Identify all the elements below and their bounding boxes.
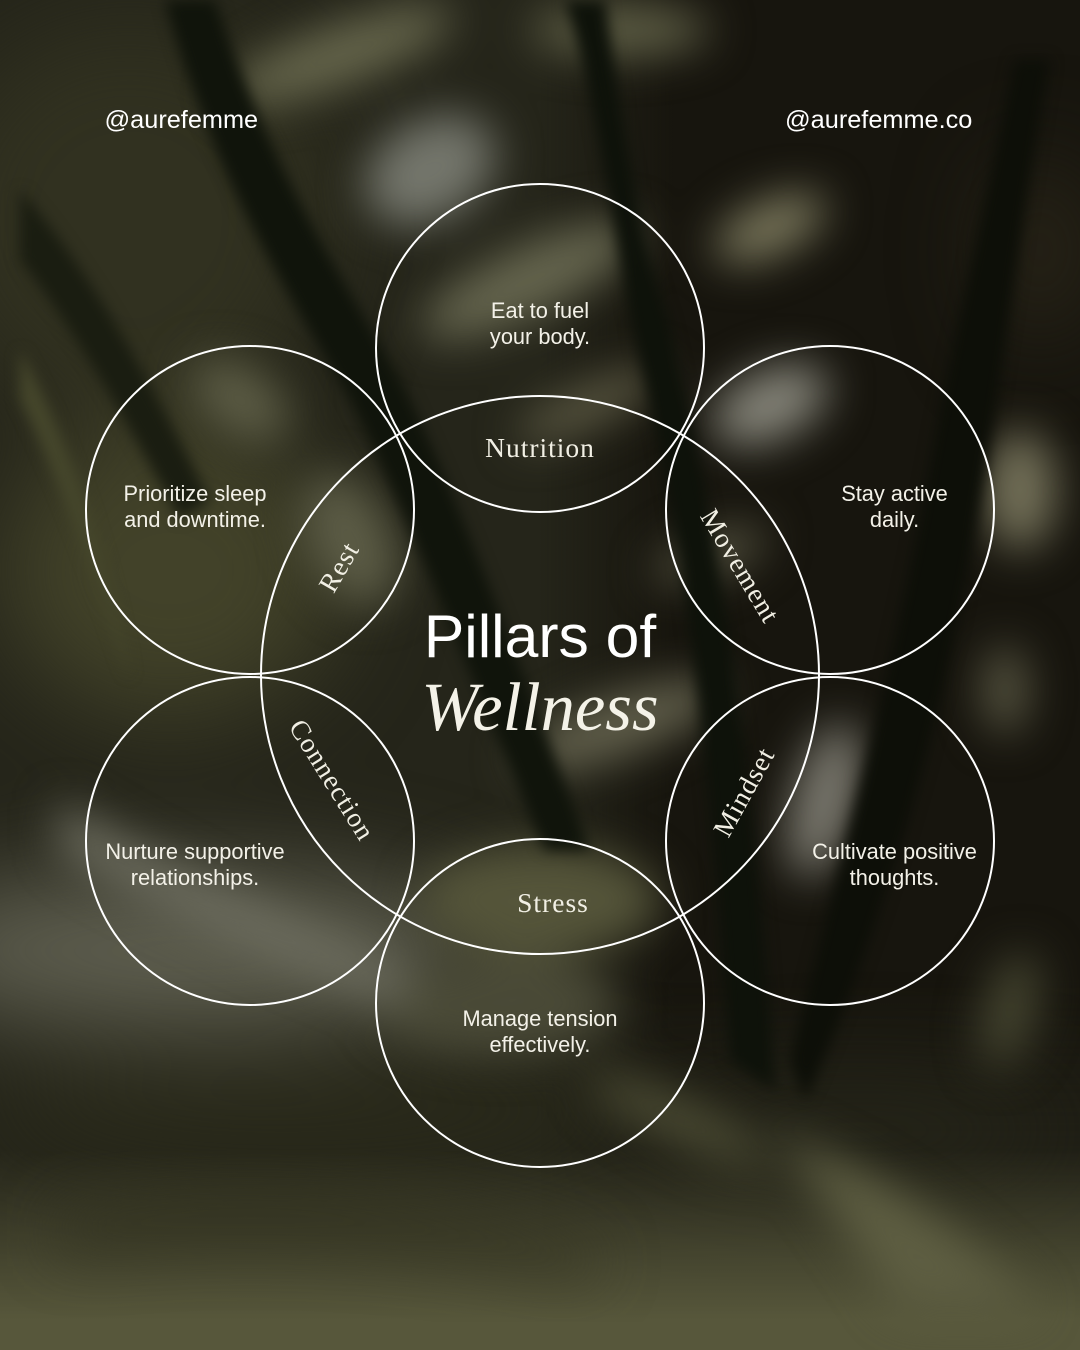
label: nutrition: Nutrition bbox=[485, 432, 595, 463]
text: movement: daily. bbox=[870, 507, 919, 532]
pillar labels in overlaps bbox=[283, 432, 786, 918]
circle diagram outlines bbox=[86, 184, 994, 1167]
central circle bbox=[261, 396, 819, 954]
handle: left: @aurefemme bbox=[104, 106, 258, 134]
text: rest bbox=[124, 481, 266, 532]
label: stress: Stress bbox=[517, 887, 589, 918]
label: movement: Movement bbox=[694, 503, 786, 628]
text: mindset: Cultivate positive bbox=[812, 839, 977, 864]
text: nutrition bbox=[490, 298, 590, 349]
label: rest: Rest bbox=[312, 536, 365, 597]
text: nutrition: Eat to fuel bbox=[491, 298, 589, 323]
text: connection bbox=[105, 839, 285, 890]
circle: movement bbox=[666, 346, 994, 674]
title bbox=[421, 602, 659, 745]
label: mindset: Mindset bbox=[706, 742, 781, 842]
handle: right: @aurefemme.co bbox=[785, 106, 972, 134]
text: connection: relationships. bbox=[131, 865, 259, 890]
text: rest: Prioritize sleep bbox=[124, 481, 266, 506]
text: rest: and downtime. bbox=[124, 507, 266, 532]
text: nutrition: your body. bbox=[490, 324, 590, 349]
text: stress: Manage tension bbox=[462, 1006, 618, 1031]
circle: mindset bbox=[666, 677, 994, 1005]
title line 1: Pillars of bbox=[424, 602, 656, 670]
text: stress bbox=[462, 1006, 618, 1057]
label: connection: Connection bbox=[283, 714, 382, 846]
text: movement: Stay active bbox=[841, 481, 948, 506]
circle: stress bbox=[376, 839, 704, 1167]
text: mindset bbox=[812, 839, 977, 890]
text: connection: Nurture supportive bbox=[105, 839, 285, 864]
text: mindset: thoughts. bbox=[850, 865, 939, 890]
circle: nutrition bbox=[376, 184, 704, 512]
text: movement bbox=[841, 481, 948, 532]
circle: connection bbox=[86, 677, 414, 1005]
title line 2: Wellness bbox=[421, 669, 659, 745]
circle: rest bbox=[86, 346, 414, 674]
text: stress: effectively. bbox=[490, 1032, 590, 1057]
